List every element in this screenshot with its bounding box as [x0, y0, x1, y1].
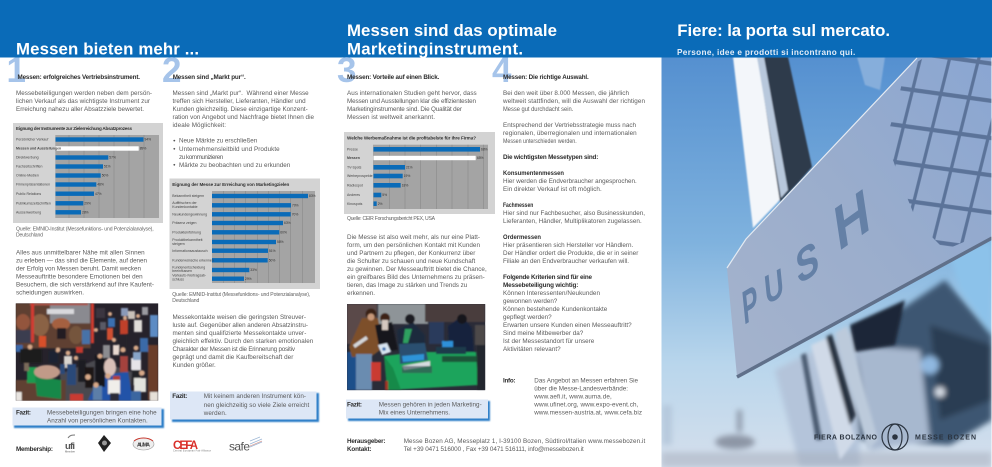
logo: safe: safe [229, 440, 250, 454]
bar chart: marketing goals: 70% [292, 212, 298, 216]
column 1 body text: zu erleben — das sind die Elemente, auf denen [16, 258, 147, 264]
column 2 body text: Charakter der Messen ist die Erinnerung positiv [172, 346, 296, 353]
bar chart: instruments: 29% [84, 202, 91, 206]
bar chart: marketing goals: Kundenentscheidung [172, 266, 205, 270]
bar chart: marketing goals: Präsenz zeigen [172, 221, 196, 225]
bar chart: profitable advertising: Kinospots [347, 202, 363, 206]
trade fair types heading: Die wichtigsten Messetypen sind: [503, 154, 598, 161]
consumer fairs: Hier werden die Endverbraucher angesprochen. [503, 178, 637, 185]
bar chart: marketing goals: Verkaufs-/Vertragsab- [172, 274, 207, 278]
callout: Fazit 1: Messebeteiligungen bringen eine hohe [47, 410, 157, 416]
criteria list: Folgende Kriterien sind für eine [503, 274, 592, 281]
column 4 intro text: regionalen, überregionalen und internationalen [503, 130, 637, 137]
column 1 body text: scheidungen auswirken. [16, 290, 84, 296]
criteria list: Messebeteiligung wichtig: [503, 282, 578, 289]
bar chart: instruments: Aussenwerbung [16, 210, 41, 214]
column 1 intro text: Messebeteiligungen werden neben dem persön- [16, 90, 152, 97]
bar chart: instruments: 48% [97, 183, 104, 187]
imprint: Herausgeber: [347, 438, 386, 445]
chart source: Deutschland [172, 298, 199, 304]
bar chart: marketing goals: 51% [269, 249, 276, 253]
column 3 body text: Die Messe ist also weit mehr, als nur eine Platt- [347, 234, 480, 241]
callout: Fazit 1: Fazit: [16, 410, 31, 416]
bar chart: profitable advertising: 65% [477, 156, 484, 160]
bar chart: instruments [13, 123, 163, 223]
logo: Fiera Bolzano Messe Bozen: MESSE BOZEN [915, 435, 976, 442]
info block [503, 378, 642, 416]
column 2 intro text [172, 90, 314, 129]
bar chart: marketing goals: 60% [280, 230, 287, 234]
logo: ufi: Member [65, 450, 75, 454]
info block: www.ufinet.org, www.expo-event.ch, [533, 402, 639, 408]
column 3 body text: ein greifbares Bild des Unternehmens zu präsen- [347, 274, 485, 281]
bar chart: marketing goals: beeinflussen [172, 269, 192, 273]
info block: www.aefi.it, www.auma.de, [533, 394, 612, 400]
logo: safe [229, 437, 262, 454]
bullet list: Neue Märkte zu erschließen [179, 138, 258, 144]
column 2 body text: luste auf. Gegenüber allen anderen Absatzinstru- [172, 322, 308, 329]
callout: Fazit 1: Anzahl von persönlichen Kontakten. [47, 418, 148, 424]
column 3 body text: zu gewinnen. Der Messeauftritt bietet die Chance, [347, 266, 487, 273]
criteria list: gepflegt werden? [503, 314, 552, 321]
imprint: Messe Bozen AG, Messeplatz 1, I-39100 Bozen, Südtirol/Italien www.messebozen.it [404, 438, 646, 445]
bar chart: profitable advertising: 68% [481, 148, 488, 152]
bar chart: profitable advertising: TV-Spots [347, 166, 362, 170]
column 1 intro text [16, 90, 152, 113]
column 3 body text [347, 234, 487, 297]
column 3 body text: tieren, das Image zu stärken und Trends zu [347, 282, 468, 289]
column 4 intro text: Bei den weit über 8.000 Messen, die jährlich [503, 90, 629, 97]
plate lettering [742, 189, 869, 324]
column 4 intro text [502, 90, 645, 145]
column 1 body text: Messeauftritte besondere Emotionen bei den [16, 274, 143, 280]
info block: www.messen-austria.at, www.cefa.biz [533, 410, 642, 416]
column 2 intro text: Kunden gleichzeitig. Diese einzigartige Konzent- [172, 106, 308, 113]
callout: Fazit 2: Mit keinem anderen Instrument kön- [204, 393, 306, 400]
trade visitor fairs [503, 202, 645, 225]
column 2 subheading: Messen sind „Markt pur“. [173, 74, 246, 81]
heading: optimal marketing instrument: Messen sind das optimale [347, 21, 557, 40]
info block: Das Angebot an Messen erfahren Sie [534, 378, 638, 384]
logo: Fiera Bolzano Messe Bozen: FIERA BOLZANO [814, 435, 878, 442]
imprint [347, 438, 646, 453]
info block: Info: [503, 378, 516, 384]
bar chart: instruments: Public Relations [16, 192, 41, 196]
header band [0, 0, 992, 58]
callout: Fazit 3 [346, 400, 490, 421]
bar chart: instruments: 94% [144, 138, 151, 142]
imprint: Kontakt: [347, 446, 372, 453]
column 2 body text: geprägt und damit die Kaufbereitschaft der [172, 354, 293, 361]
chart source: Quelle: EMNID-Institut (Messefunktions- und Potenzialanalyse), [172, 292, 310, 298]
consumer fairs [503, 170, 637, 193]
callout: Fazit 2: Fazit: [172, 393, 187, 400]
bar chart: marketing goals: schluss [172, 278, 184, 282]
bar chart: profitable advertising: 5% [382, 193, 387, 197]
bar chart: marketing goals: 33% [250, 268, 257, 272]
logo: CEFA: Central European Fair Alliance [173, 450, 212, 453]
column 3 intro text: Marketinginstrumente sind. Die Qualität der [347, 106, 462, 113]
chart source: Deutschland [16, 233, 43, 239]
bar chart: marketing goals: Neukundengewinnung [172, 212, 207, 216]
bar chart: instruments: Fachzeitschriften [16, 165, 43, 169]
column 3 body text: und Partnern zu pflegen, der Konkurrenz über [347, 250, 475, 257]
bar chart: instruments: 50% [102, 174, 108, 178]
column 3 intro text: Messen ist weltweit anerkannt. [347, 114, 435, 121]
bar chart: marketing goals: 70% [292, 204, 299, 208]
order fairs: Der Händler ordert die Produkte, die er in seiner [503, 250, 638, 257]
criteria list: Aktivitäten relevant? [503, 346, 561, 353]
panel: column 2 [170, 74, 320, 422]
plate lettering: U [762, 260, 786, 314]
bar chart: marketing goals: Informationsaustausch [172, 249, 208, 253]
callout: Fazit 1 [12, 408, 164, 428]
order fairs: Hier präsentieren sich Hersteller vor Händlern. [503, 242, 634, 249]
column 1 body text: der Erfolg von Messen beruht. Damit wecken [16, 266, 141, 272]
logo: Fiera Bolzano Messe Bozen [814, 424, 976, 450]
bullet list: Märkte zu beobachten und zu erkunden [179, 162, 291, 169]
bar chart: instruments: Publikumszeitschriften [16, 202, 51, 206]
plate lettering: S [793, 230, 821, 296]
callout: Fazit 3: Messen gehören in jeden Marketing- [379, 402, 482, 408]
column 1 body text: Besuchern, die sich verstärkend auf ihre Kaufent- [16, 282, 154, 288]
column 2 body text: gleichlich effektiv. Durch den starken emotionalen [172, 338, 314, 345]
logo: ufi [65, 435, 75, 454]
bar chart: profitable advertising: Anderes [347, 193, 360, 197]
plate lettering: H [830, 174, 874, 265]
heading: Fiere la porta sul mercato: Fiere: la porta sul mercato. [677, 21, 890, 40]
chart source [172, 292, 310, 304]
bar chart: instruments: Direktwerbung [16, 156, 39, 160]
bullet list: Unternehmensleitbild und Produkte [179, 146, 280, 153]
column 4 intro text: Messen unterschieden werden. [503, 138, 577, 145]
bar chart: marketing goals: Bekanntheit steigern [172, 194, 204, 198]
column 2 intro text: ration von Angebot und Nachfrage bietet Ihnen die [172, 114, 314, 121]
criteria list [503, 274, 632, 353]
bar chart: instruments: 28% [82, 210, 89, 214]
bar chart: instruments: Messen und Ausstellungen [16, 147, 61, 151]
column 3 body text: die Schulter zu schauen und neue Kundschaft [347, 258, 476, 265]
bullet list: zu kommunizieren [179, 154, 224, 161]
column 2 intro text: Messen sind „Markt pur“. Während einer Messe [172, 90, 309, 97]
bar chart: profitable advertising: 19% [404, 174, 410, 178]
heading: Messen bieten mehr: Messen bieten mehr ... [16, 40, 199, 58]
photo: visitors at green stand [347, 304, 485, 390]
column 3 intro text: Messen und Ausstellungen klar die effizientesten [347, 98, 476, 105]
callout: Fazit 2 [170, 392, 319, 422]
bar chart: instruments: 47% [95, 192, 102, 196]
bar chart: marketing goals: steigern [172, 242, 185, 246]
panel: column 4 [502, 74, 645, 416]
column 2 body text: menten sind qualifizierte Messekontakte unver- [172, 330, 306, 337]
column 4 subheading: Messen: Die richtige Auswahl. [503, 74, 589, 81]
column 2 intro text: treffen sich Hersteller, Lieferanten, Händler und [172, 98, 306, 105]
numeral 3: 3 [337, 51, 356, 90]
bar chart: profitable advertising: Radiospot [347, 184, 363, 188]
column 4 intro text: Messe gut durchdacht sein. [503, 106, 574, 113]
chart source: Quelle: CEIR Forschungsbericht PEX, USA [347, 216, 436, 222]
bar chart: instruments: Firmenpräsentationen [16, 183, 50, 187]
logo: AUMA: AUMA [137, 442, 150, 448]
bar chart: profitable advertising [344, 132, 495, 214]
bar chart: marketing goals: Eignung der Messe zur Erreichung von Marketingzielen [172, 182, 289, 187]
column 2 intro text: ideale Möglichkeit: [172, 122, 226, 129]
heading: optimal marketing instrument: Marketinginstrument. [347, 40, 523, 58]
column 3 intro text [347, 90, 477, 121]
order fairs: Filiale an den Endverbraucher verkaufen will. [503, 258, 629, 265]
chart source: Quelle: EMNID-Institut (Messefunktions- und Potenzialanalyse), [16, 226, 154, 232]
callout: Fazit 2: werden. [203, 410, 227, 417]
column 1 intro text: lichen Verkauf als das wichtigste Instrument zur [16, 98, 150, 105]
criteria list: Können bestehende Kundenkontakte [503, 306, 608, 313]
trade visitor fairs: Fachmessen [503, 202, 533, 209]
order fairs: Ordermessen [503, 234, 541, 241]
numeral 4: 4 [492, 51, 512, 90]
callout: Fazit 3: Mix eines Unternehmens. [379, 410, 450, 416]
bar chart: marketing goals [170, 178, 320, 289]
bar chart: marketing goals: Produktbekanntheit [172, 238, 202, 242]
bar chart: instruments: 89% [140, 147, 146, 151]
column 2 body text: Messekontakte weisen die geringsten Streuver- [172, 314, 306, 321]
column 1 intro text: Erreichung nahezu aller Absatzziele bewertet. [16, 106, 144, 113]
label: Membership: Membership: [16, 446, 53, 453]
bar chart: marketing goals: 63% [284, 221, 291, 225]
order fairs [503, 234, 638, 265]
bar chart: instruments: Online-Medien [16, 174, 39, 178]
criteria list: Erwarten unsere Kunden einen Messeauftritt? [503, 322, 632, 329]
bar chart: profitable advertising: Presse [347, 148, 358, 152]
photo: trade fair crowd [16, 303, 158, 401]
bar chart: marketing goals: Kundenkontakte [172, 205, 198, 209]
subheading: Persone idee e prodotti: Persone, idee e prodotti si incontrano qui. [677, 48, 855, 57]
imprint: Tel +39 0471 516000 , Fax +39 0471 516111, info@messebozen.it [404, 446, 584, 453]
column 1 body text: Alles aus unmittelbarer Nähe mit allen Sinnen [16, 250, 145, 256]
criteria list: Sind meine Mitbewerber da? [503, 330, 584, 337]
chart source [16, 226, 154, 239]
consumer fairs: Ein direkter Verkauf ist oft möglich. [503, 186, 602, 193]
bar chart: instruments: Eignung der Instrumente zur Zielerreichung Absatzprozess [16, 126, 132, 131]
column 2 body text: Kunden größer. [172, 362, 216, 369]
bar chart: instruments: Persönlicher Verkauf [16, 138, 48, 142]
bar chart: marketing goals: 29% [245, 277, 252, 281]
panel: column 1 [12, 74, 262, 454]
column 3 intro text: Aus internationalen Studien geht hervor, dass [347, 90, 477, 97]
heading: optimal marketing instrument [347, 21, 557, 58]
bar chart: marketing goals: Kundenwünsche erkennen [172, 258, 214, 262]
callout: Fazit 3: Fazit: [347, 402, 362, 408]
trade visitor fairs: Lieferanten, Händler, Multiplikatoren zugelassen. [503, 218, 642, 225]
bar chart: profitable advertising: 18% [402, 184, 408, 188]
column 4 intro text: weltweit stattfinden, will die Auswahl der richtigen [502, 98, 645, 105]
criteria list: Können Interessenten/Neukunden [503, 290, 600, 297]
bar chart: marketing goals: 83% [309, 194, 316, 198]
criteria list: gewonnen werden? [503, 298, 558, 305]
trade visitor fairs: Hier sind nur Fachbesucher, also Businesskunden, [503, 210, 645, 217]
bar chart: profitable advertising: Welche Werbemaßnahme ist die profitabelste für Ihre Firma? [347, 136, 476, 140]
bar chart: instruments: 51% [104, 165, 111, 169]
logo: shield [98, 435, 111, 452]
push plate [727, 57, 992, 377]
bullet list [173, 138, 291, 169]
bar chart: marketing goals: 50% [269, 258, 275, 262]
column 3 subheading: Messen: Vorteile auf einen Blick. [347, 74, 440, 81]
bar chart: profitable advertising: Messen [347, 156, 360, 160]
plate lettering: P [740, 276, 760, 336]
bar chart: profitable advertising: Werbeprospekte [347, 174, 373, 178]
column 1 subheading: Messen: erfolgreiches Vertriebsinstrument. [18, 74, 140, 81]
numeral 1: 1 [6, 51, 26, 90]
consumer fairs: Konsumentenmessen [503, 170, 564, 177]
numeral 2: 2 [162, 51, 181, 90]
bar chart: marketing goals: Aufffrischen der [172, 201, 198, 205]
bar chart: marketing goals: 58% [277, 240, 284, 244]
column 2 body text [172, 314, 314, 369]
bar chart: profitable advertising: 21% [406, 166, 413, 170]
callout: Fazit 2: nen gleichzeitig so viele Ziele erreicht [204, 402, 310, 409]
panel: column 3 [344, 74, 646, 453]
bar chart: instruments: 57% [109, 156, 116, 160]
logo: CEFA: CEFA [173, 440, 198, 452]
criteria list: Ist der Messestandort für unsere [503, 338, 595, 345]
column 3 body text: form, um den persönlichen Kontakt mit Kunden [347, 242, 480, 249]
logo: CEFA [173, 440, 212, 453]
logo: ufi: ufi [65, 441, 75, 452]
logo: AUMA [133, 438, 154, 450]
panel: cover photo with push plate [662, 57, 992, 467]
background structures [733, 57, 885, 228]
info block: über die Messe-Landesverbände: [534, 386, 628, 392]
bar chart: profitable advertising: 2% [378, 202, 383, 206]
column 4 intro text: Entsprechend der Vertriebsstrategie muss nach [503, 122, 636, 129]
bar chart: marketing goals: Produkteinführung [172, 230, 201, 234]
column 3 body text: erkennen. [347, 290, 375, 297]
column 1 body text [16, 250, 154, 296]
